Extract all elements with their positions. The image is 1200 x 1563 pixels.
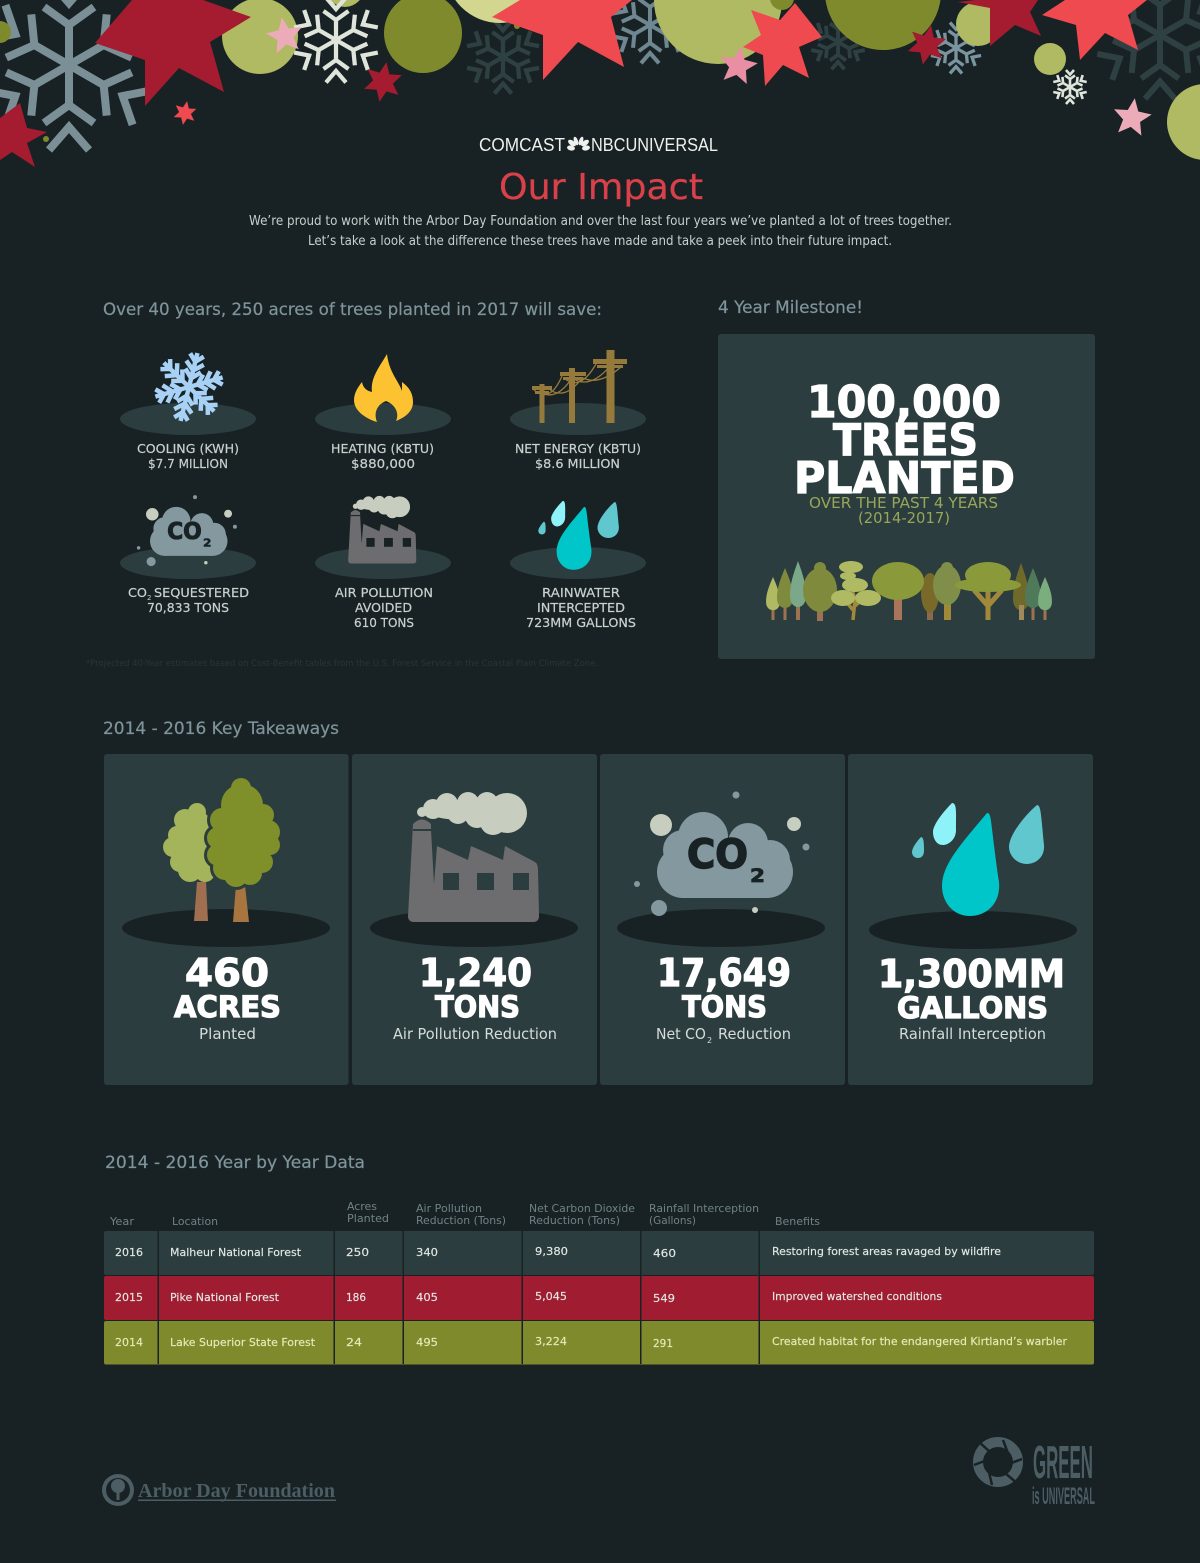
table header: Rainfall Interception <box>649 1202 759 1215</box>
row: 2015: 186 <box>346 1291 366 1304</box>
table header: Acres <box>347 1200 377 1213</box>
icon: flame <box>354 354 413 422</box>
table header: Reduction (Tons) <box>416 1214 506 1227</box>
heading: key takeaways: 2014 - 2016 Key Takeaways <box>103 719 339 739</box>
milestone subtitle <box>809 494 998 527</box>
logo: Green is Universal <box>974 1436 1095 1510</box>
row: 2016 <box>104 1231 1094 1275</box>
row: 2015: 5,045 <box>535 1290 567 1303</box>
table: year by year <box>104 1200 1094 1364</box>
row: 2015 <box>104 1276 1094 1320</box>
icon: CO2 cloud <box>634 792 810 916</box>
row: 2016: Malheur National Forest <box>170 1246 302 1259</box>
bonsai tree <box>831 561 881 620</box>
stat: CO2 sequestered: 2 <box>147 594 151 602</box>
intro text: Let’s take a look at the difference these trees have made and take a peek into their future impact. <box>308 234 892 249</box>
icon: water drops <box>912 803 1044 916</box>
row: 2015: 549 <box>653 1292 675 1305</box>
stat: heating: HEATING (KBTU) <box>331 441 434 456</box>
row: 2015: 2015 <box>115 1291 143 1304</box>
panel: net CO2 reduction <box>600 754 845 1085</box>
icon: water drops <box>538 501 619 570</box>
stat: air pollution avoided: AVOIDED <box>355 600 412 615</box>
milestone headline: 100,000 <box>807 377 1001 428</box>
panel: net CO2 reduction: 2 <box>707 1036 712 1045</box>
panel: air pollution reduction <box>352 754 597 1085</box>
panel: acres planted: Planted <box>199 1025 256 1043</box>
stat: net energy: $8.6 MILLION <box>535 456 620 471</box>
acacia tree <box>955 562 1021 620</box>
logo: Arbor Day Foundation <box>102 1474 336 1506</box>
row: 2014: 495 <box>416 1336 438 1349</box>
text: is UNIVERSAL <box>1032 1483 1095 1510</box>
panel: net CO2 reduction: TONS <box>682 990 767 1024</box>
table header: Net Carbon Dioxide <box>529 1202 635 1215</box>
footnote: *Projected 40-Year estimates based on Cost-Benefit tables from the U.S. Forest Service in the Coastal Plain Climate Zone. <box>86 659 598 669</box>
stat: CO2 sequestered <box>120 495 256 615</box>
row: 2014: 3,224 <box>535 1335 567 1348</box>
table header: Year <box>109 1215 134 1228</box>
row: 2014: 291 <box>653 1337 673 1350</box>
icon: two trees <box>163 778 280 922</box>
panel: rainfall interception: Rainfall Interception <box>899 1025 1046 1043</box>
row: 2015: 405 <box>416 1291 438 1304</box>
icon: factory <box>348 496 416 563</box>
heading: 40 year savings: Over 40 years, 250 acres of trees planted in 2017 will save: <box>103 300 602 320</box>
stat: air pollution avoided: AIR POLLUTION <box>335 585 433 600</box>
panel: net CO2 reduction: Net CO <box>656 1025 706 1043</box>
table header: Planted <box>347 1212 389 1225</box>
row: 2014: 24 <box>346 1336 362 1349</box>
heading: milestone: 4 Year Milestone! <box>718 298 863 318</box>
stat: rainwater intercepted: RAINWATER <box>542 585 620 600</box>
table header: Benefits <box>775 1215 820 1228</box>
milestone headline: TREES <box>833 415 978 466</box>
stat: rainwater intercepted: 723MM GALLONS <box>526 615 636 630</box>
table header: Air Pollution <box>416 1202 482 1215</box>
table header: (Gallons) <box>649 1214 696 1227</box>
stat: CO2 sequestered: SEQUESTERED <box>154 585 249 600</box>
panel: rainfall interception <box>848 754 1093 1085</box>
stat: air pollution avoided: 610 TONS <box>354 615 414 630</box>
row: 2016: 340 <box>416 1246 438 1259</box>
Comcast NBCUniversal logo: NBCUNIVERSAL <box>591 135 718 155</box>
table header <box>109 1200 820 1228</box>
row: 2014 <box>104 1321 1094 1364</box>
stat: CO2 sequestered: 70,833 TONS <box>147 600 229 615</box>
title: Our Impact <box>499 167 703 208</box>
intro text <box>249 214 952 249</box>
table header: Location <box>172 1215 218 1228</box>
stat: cooling: $7.7 MILLION <box>148 456 228 471</box>
intro text: We’re proud to work with the Arbor Day Foundation and over the last four years we’ve planted a lot of trees together. <box>249 214 952 229</box>
icon: power poles <box>532 350 627 423</box>
stat: cooling: COOLING (KWH) <box>137 441 239 456</box>
stat: rainwater intercepted: INTERCEPTED <box>537 600 625 615</box>
stat: CO2 sequestered: CO <box>128 585 147 600</box>
Comcast NBCUniversal logo <box>479 135 718 155</box>
stat: net energy <box>510 350 646 471</box>
panel: rainfall interception: GALLONS <box>897 991 1048 1025</box>
row: 2016: 9,380 <box>535 1245 568 1258</box>
logo: Arbor Day Foundation: Arbor Day Foundation <box>138 1480 335 1502</box>
icon: row of trees <box>766 561 1052 621</box>
panel: net CO2 reduction: Reduction <box>718 1025 791 1043</box>
text: GREEN <box>1033 1436 1093 1488</box>
panel: acres planted <box>104 754 348 1085</box>
Comcast NBCUniversal logo: COMCAST <box>479 135 565 155</box>
row: 2016: 250 <box>346 1246 369 1259</box>
row: 2015: Improved watershed conditions <box>772 1290 942 1303</box>
heading: year by year data: 2014 - 2016 Year by Year Data <box>105 1153 365 1173</box>
milestone headline <box>794 377 1015 504</box>
row: 2014: Lake Superior State Forest <box>170 1336 316 1349</box>
row: 2015: Pike National Forest <box>170 1291 280 1304</box>
icon: CO2 cloud <box>137 495 237 566</box>
panel: rainfall interception: 1,300MM <box>878 952 1065 996</box>
stat: net energy: NET ENERGY (KBTU) <box>515 441 641 456</box>
milestone subtitle: (2014-2017) <box>858 509 950 527</box>
row: 2014: Created habitat for the endangered Kirtland’s warbler <box>772 1335 1067 1348</box>
icon: factory <box>408 792 539 922</box>
panel: net CO2 reduction: 17,649 <box>657 951 791 995</box>
row: 2016: 460 <box>653 1247 676 1260</box>
panel: milestone <box>718 334 1095 659</box>
panel: acres planted: ACRES <box>174 990 281 1024</box>
row: 2016: 2016 <box>115 1246 143 1259</box>
stat: air pollution avoided <box>315 496 451 630</box>
table header: Reduction (Tons) <box>529 1214 620 1227</box>
icon: snowflake <box>147 345 231 429</box>
panel: air pollution reduction: 1,240 <box>419 951 532 995</box>
panel: air pollution reduction: TONS <box>435 990 520 1024</box>
stat: heating <box>315 354 451 471</box>
panel: acres planted: 460 <box>185 951 269 995</box>
row: 2016: Restoring forest areas ravaged by wildfire <box>772 1245 1001 1258</box>
milestone subtitle: OVER THE PAST 4 YEARS <box>809 494 998 512</box>
milestone headline: PLANTED <box>794 453 1015 504</box>
decorative banner: ornaments, stars and snowflakes <box>0 0 1200 167</box>
panel: air pollution reduction: Air Pollution Reduction <box>393 1025 557 1043</box>
stat: heating: $880,000 <box>351 456 415 471</box>
stat: rainwater intercepted <box>510 501 646 630</box>
row: 2014: 2014 <box>115 1336 143 1349</box>
stat: cooling <box>120 345 256 471</box>
